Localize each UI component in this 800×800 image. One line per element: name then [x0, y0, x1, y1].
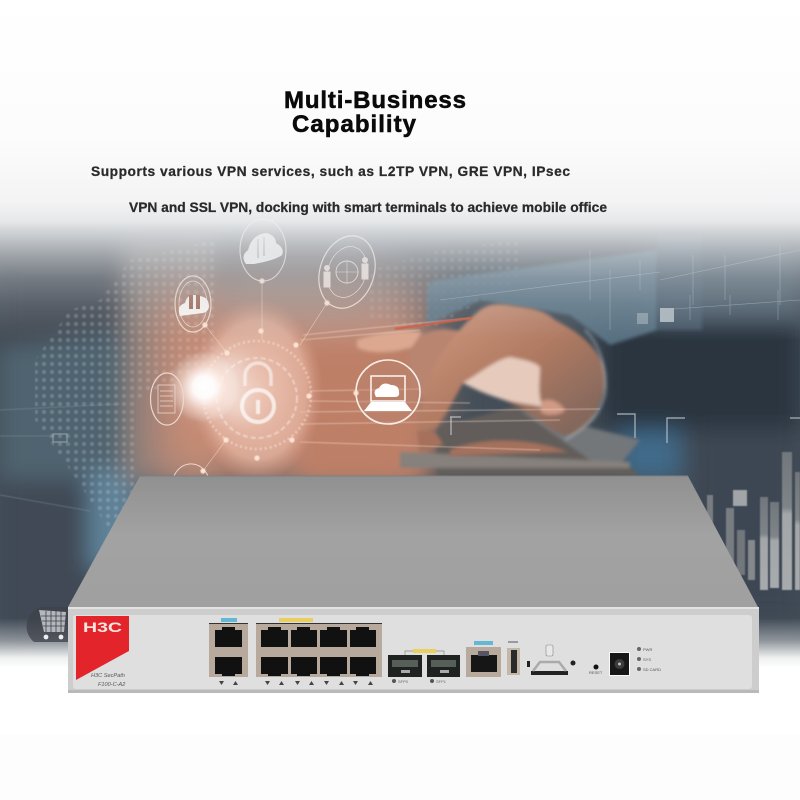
dot map top centre — [370, 240, 520, 330]
white corner brackets — [450, 414, 800, 443]
left streak lines — [0, 404, 120, 511]
status LEDs — [637, 647, 661, 672]
model label: F100-C-A2 — [98, 682, 126, 688]
title: Capability — [292, 111, 417, 138]
icon: cloud with people — [175, 276, 211, 332]
label: LAN ports tag — [279, 618, 313, 622]
description text: VPN and SSL VPN, docking with smart terminals to achieve mobile office — [129, 200, 607, 215]
brand badge: H3C: H3C — [83, 620, 122, 635]
LAN ethernet ports — [256, 623, 382, 677]
glowing light streaks — [300, 318, 600, 450]
table surface — [400, 405, 640, 476]
top white fade — [0, 0, 800, 340]
warm central light — [150, 265, 430, 485]
icon: shopping cart — [27, 607, 68, 642]
label: WAN ports tag — [221, 618, 237, 622]
icon: document circle — [150, 373, 184, 425]
hero photo: digital security scene — [0, 200, 800, 675]
SFP ports — [388, 655, 460, 684]
USB port — [507, 642, 520, 675]
reset button — [589, 664, 603, 675]
connection nodes — [200, 278, 359, 474]
background colour masses — [0, 240, 800, 650]
WAN ethernet ports — [209, 623, 248, 677]
description text: Supports various VPN services, such as L2TP VPN, GRE VPN, IPsec — [91, 164, 570, 179]
label: SFP ports tag — [405, 649, 444, 655]
status LEDs: SD CARD — [643, 667, 661, 672]
bottom white fade — [0, 618, 800, 668]
connector lines — [203, 281, 327, 471]
label: console tag — [474, 641, 493, 645]
SD card slot — [527, 645, 576, 675]
small rectangle marker left — [53, 434, 67, 442]
device top cover — [68, 476, 758, 607]
title — [284, 87, 466, 138]
model label: H3C SecPath — [91, 673, 125, 679]
hand — [357, 304, 606, 456]
icon: cloud upload and download — [240, 219, 286, 281]
SFP ports: SFP1 — [436, 679, 447, 684]
description text — [91, 164, 607, 215]
dot map left — [35, 240, 215, 530]
lock emblem with concentric rings — [191, 298, 323, 482]
port indicator triangles — [219, 681, 373, 685]
device front panel — [68, 607, 759, 693]
power jack — [609, 652, 630, 676]
status LEDs: SYS — [643, 657, 651, 662]
firewall device — [68, 476, 759, 693]
bright lens flare — [168, 350, 250, 423]
red light streak — [395, 318, 472, 329]
reset button: RESET — [589, 670, 603, 675]
chart bars right — [707, 452, 800, 590]
data grid lines on screen — [440, 245, 800, 330]
warm left of fingers — [300, 345, 425, 480]
data marker squares — [637, 308, 674, 324]
console port — [466, 647, 501, 677]
brand badge: H3C — [76, 616, 129, 680]
status LEDs: PWR — [643, 647, 652, 652]
right glass screen — [427, 250, 657, 345]
icon: laptop with cloud — [356, 360, 420, 424]
SFP ports: SFP0 — [398, 679, 409, 684]
icon: globe with people — [310, 228, 384, 316]
model label — [91, 673, 126, 688]
partial ring bottom — [174, 464, 208, 476]
title: Multi-Business — [284, 87, 466, 114]
